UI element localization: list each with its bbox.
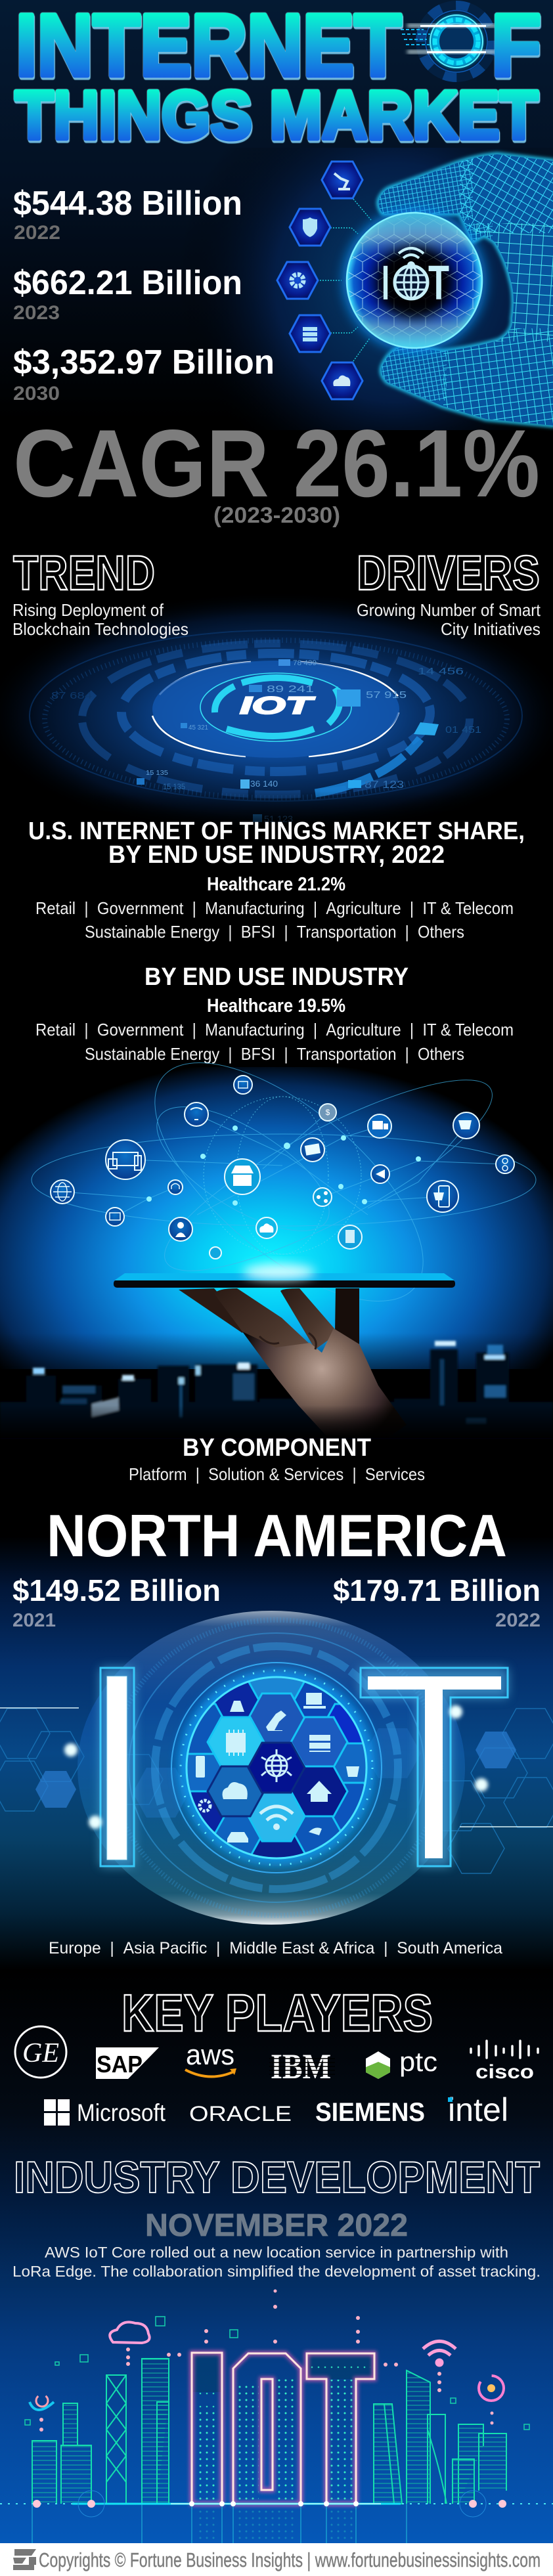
HUD illustration: IoT rings — [0, 591, 553, 840]
HUD data labels: 36 140 — [250, 779, 278, 789]
icon: globe network — [261, 1749, 292, 1782]
icon: support — [169, 1217, 192, 1241]
hexagon pattern — [0, 1709, 553, 1873]
big letter I — [100, 1668, 134, 1866]
icon: cloud — [223, 1782, 248, 1799]
reflection — [32, 2504, 407, 2543]
neon IoT cityscape — [0, 2289, 553, 2543]
drivers text: City Initiatives — [441, 619, 541, 639]
icon: video — [234, 1076, 252, 1094]
drivers text: Growing Number of Smart — [357, 600, 541, 620]
title — [15, 0, 541, 154]
logo: ptc — [366, 2046, 437, 2079]
outer rings — [30, 630, 522, 801]
end use value: Healthcare 19.5% — [207, 995, 345, 1016]
sphere icons — [196, 1693, 359, 1843]
end use segments: Sustainable Energy | BFSI | Transportation | Others — [85, 1044, 464, 1064]
neon letters IoT — [192, 2353, 374, 2504]
icon: document — [338, 1225, 362, 1249]
value 2030: 2030 — [13, 383, 60, 404]
U.S. share heading: BY END USE INDUSTRY, 2022 — [108, 841, 445, 869]
logo: Microsoft: Microsoft — [77, 2099, 166, 2126]
backdrop glow — [177, 148, 553, 430]
logo: ptc: ptc — [399, 2046, 437, 2077]
icon: robot arm — [266, 1711, 286, 1731]
by component — [129, 1434, 425, 1484]
trend — [12, 546, 188, 639]
North America section — [0, 1503, 553, 1970]
network illustration — [0, 1021, 553, 1539]
neon core — [192, 2353, 374, 2504]
North America 2021: 2021 — [12, 1610, 56, 1631]
value 2022 — [13, 185, 242, 244]
sphere — [347, 213, 482, 348]
hand under tablet — [179, 1288, 407, 1438]
U.S. share section — [28, 818, 525, 942]
hexagon icon: robot arm — [322, 162, 363, 198]
industry development — [12, 2152, 541, 2280]
icon: money: $ — [326, 1108, 330, 1117]
logo: IBM: IBM — [271, 2047, 331, 2086]
icon: phone — [210, 1247, 221, 1259]
HUD glow — [0, 591, 553, 840]
dome rings — [112, 1620, 441, 1915]
icon: globe — [51, 1180, 74, 1204]
hand outer glow — [379, 154, 553, 426]
lens flares — [0, 1705, 553, 1829]
icon: antenna — [230, 1701, 244, 1712]
icon: phone — [196, 1756, 205, 1778]
trend text — [12, 600, 188, 639]
drivers — [357, 546, 541, 639]
logo: SAP: SAP — [97, 2051, 143, 2078]
icon: laptop — [303, 1693, 326, 1709]
bottom background — [0, 1970, 553, 2543]
HUD data labels: 45 321 — [188, 724, 208, 731]
U.S. share segments: Retail | Government | Manufacturing | Agriculture | IT & Telecom — [35, 898, 514, 918]
wireframe hand — [378, 154, 553, 426]
HUD data labels: 57 915 — [366, 689, 407, 701]
market values — [13, 185, 275, 404]
IOT mark: IOT — [240, 692, 316, 719]
icon: cart — [453, 1112, 479, 1139]
U.S. share heading — [28, 818, 525, 869]
trend heading: TREND — [13, 546, 155, 600]
development text — [12, 2244, 541, 2280]
HUD data labels: 01 451 — [445, 724, 481, 735]
icon: devices — [106, 1140, 145, 1179]
footer — [0, 2543, 553, 2576]
U.S. share segments — [35, 898, 514, 942]
icon: cloud — [256, 1217, 277, 1238]
HUD data labels — [51, 659, 481, 824]
hexagon icon: gear — [277, 262, 318, 299]
end use segments — [35, 1020, 514, 1064]
icon: wifi — [399, 248, 424, 268]
trend text: Rising Deployment of — [12, 600, 164, 620]
network glow backdrop — [0, 1067, 553, 1369]
logo: GE: GE — [22, 2038, 59, 2068]
thumb — [335, 1288, 359, 1344]
end use heading: BY END USE INDUSTRY — [144, 963, 409, 991]
CAGR period: (2023-2030) — [213, 503, 340, 528]
skyline — [0, 1341, 553, 1438]
neon glow — [192, 2353, 374, 2504]
connector lines — [317, 199, 371, 361]
icon: share — [313, 1188, 332, 1206]
drivers text — [357, 600, 541, 639]
regions list: Europe | Asia Pacific | Middle East & Africa | South America — [49, 1939, 502, 1957]
North America 2022 — [333, 1573, 541, 1631]
city buildings — [32, 2359, 506, 2504]
hexagon icon: shield — [290, 209, 330, 246]
development text: AWS IoT Core rolled out a new location service in partnership with — [45, 2244, 508, 2261]
value 2023 — [13, 264, 242, 324]
logo: cisco — [471, 2041, 538, 2083]
fade beneath HUD — [0, 791, 553, 834]
hexagon icon: server — [290, 315, 330, 352]
ring finger — [280, 1288, 338, 1349]
sphere glow — [342, 208, 487, 353]
icon: chip — [227, 1730, 245, 1756]
network icons — [51, 1076, 514, 1259]
value 2022: 2022 — [14, 222, 60, 244]
value 2022: $544.38 Billion — [13, 185, 242, 223]
icon: phone cart — [427, 1181, 458, 1212]
hexagon icon: cloud — [322, 362, 363, 399]
tablet — [114, 1264, 455, 1288]
sphere hexagons — [188, 1678, 365, 1857]
filled hexagons — [35, 1728, 516, 1818]
icon: truck — [368, 1114, 391, 1138]
glowing nodes — [146, 1125, 421, 1206]
logo: Siemens: SIEMENS — [315, 2098, 425, 2127]
icon: dollar people — [496, 1155, 514, 1173]
icon: basket — [346, 1766, 359, 1777]
logo: aws: aws — [186, 2039, 234, 2071]
icon: money — [319, 1104, 336, 1121]
horizon lights — [33, 2491, 506, 2517]
icon: cloud — [110, 2322, 150, 2343]
key players heading: KEY PLAYERS — [122, 1984, 433, 2042]
icon: car — [227, 1832, 248, 1843]
middle finger — [214, 1288, 312, 1363]
North America 2022: $179.71 Billion — [333, 1573, 541, 1607]
palm — [242, 1328, 407, 1438]
cyan arc segments — [215, 678, 340, 736]
HUD data labels: 78 439 — [293, 659, 317, 667]
trend text: Blockchain Technologies — [12, 619, 188, 639]
icon: server — [309, 1735, 330, 1752]
U.S. share value: Healthcare 21.2% — [207, 874, 345, 895]
HUD data labels: 89 241 — [267, 684, 314, 695]
development date: NOVEMBER 2022 — [145, 2208, 408, 2243]
bottom fade over hand — [0, 1405, 553, 1438]
inner disc — [152, 661, 399, 758]
HUD data labels: 15 135 — [146, 770, 168, 777]
dome — [77, 1611, 465, 1925]
letter T: T — [428, 255, 449, 310]
icon: wifi devices — [185, 1102, 208, 1126]
North America 2021: $149.52 Billion — [12, 1573, 221, 1607]
value 2023: $662.21 Billion — [13, 264, 242, 302]
header background — [0, 0, 553, 420]
logo: Intel: intel — [448, 2091, 508, 2128]
HUD data labels: 51 123 — [264, 814, 293, 824]
neon letter fills — [192, 2353, 374, 2392]
icon: wifi — [423, 2342, 456, 2365]
icon: mail — [106, 1208, 124, 1226]
key players — [15, 1984, 538, 2128]
component heading: BY COMPONENT — [183, 1434, 371, 1462]
decorative teal squares — [25, 2317, 529, 2430]
logo: cisco: cisco — [476, 2061, 534, 2083]
region title: NORTH AMERICA — [47, 1503, 507, 1569]
value 2030: $3,352.97 Billion — [13, 343, 275, 382]
footer bar — [0, 2543, 553, 2576]
development text: LoRa Edge. The collaboration simplified the development of asset tracking. — [12, 2263, 541, 2280]
logo: SAP — [96, 2047, 159, 2079]
end use segments: Retail | Government | Manufacturing | Agriculture | IT & Telecom — [35, 1020, 514, 1039]
North America 2021 — [12, 1573, 221, 1631]
U.S. share segments: Sustainable Energy | BFSI | Transportation | Others — [85, 922, 464, 942]
icon: megaphone — [371, 1165, 389, 1183]
icon: wifi — [260, 1806, 293, 1828]
HUD data labels: 15 135 — [163, 782, 185, 791]
value 2030 — [13, 343, 275, 404]
icon: house — [307, 1781, 332, 1802]
hex sphere — [172, 1663, 381, 1872]
orbit lines — [32, 1021, 536, 1343]
end use industry section — [35, 963, 514, 1064]
value 2023: 2023 — [13, 302, 60, 324]
logo: Microsoft — [44, 2099, 166, 2126]
HUD data labels: 87 123 — [365, 779, 404, 791]
HUD data labels: 87 684 — [51, 690, 92, 701]
index finger — [179, 1288, 246, 1333]
logo: Oracle: ORACLE — [189, 2102, 292, 2126]
icon: gear — [200, 1801, 210, 1811]
decorative pink dots — [39, 2289, 494, 2432]
footer logo — [13, 2549, 36, 2570]
hero illustration: wireframe hand holding IoT sphere — [226, 148, 553, 431]
logo: GE — [15, 2026, 66, 2078]
icon: globe — [395, 266, 428, 299]
component list: Platform | Solution & Services | Services — [129, 1464, 425, 1484]
icon: arrows — [309, 1827, 322, 1835]
icon: headset — [168, 1180, 183, 1194]
North America 2022: 2022 — [495, 1610, 541, 1631]
IoT mark — [382, 248, 449, 310]
HUD data labels: 14 456 — [418, 666, 464, 677]
neon dot fields — [195, 2357, 370, 2504]
sky fade — [0, 1333, 553, 1405]
big letter T — [361, 1668, 508, 1866]
letter I: I — [382, 255, 389, 310]
icon: ring right — [479, 2376, 504, 2401]
U.S. share heading: U.S. INTERNET OF THINGS MARKET SHARE, — [28, 818, 525, 845]
horizon line — [0, 2503, 553, 2504]
icon: ring left — [30, 2395, 54, 2410]
icon: glowing gear — [401, 1, 497, 82]
icon: card — [301, 1138, 324, 1162]
regional backdrop — [0, 1537, 553, 1970]
white ring — [152, 662, 399, 756]
icon: store — [225, 1159, 260, 1194]
